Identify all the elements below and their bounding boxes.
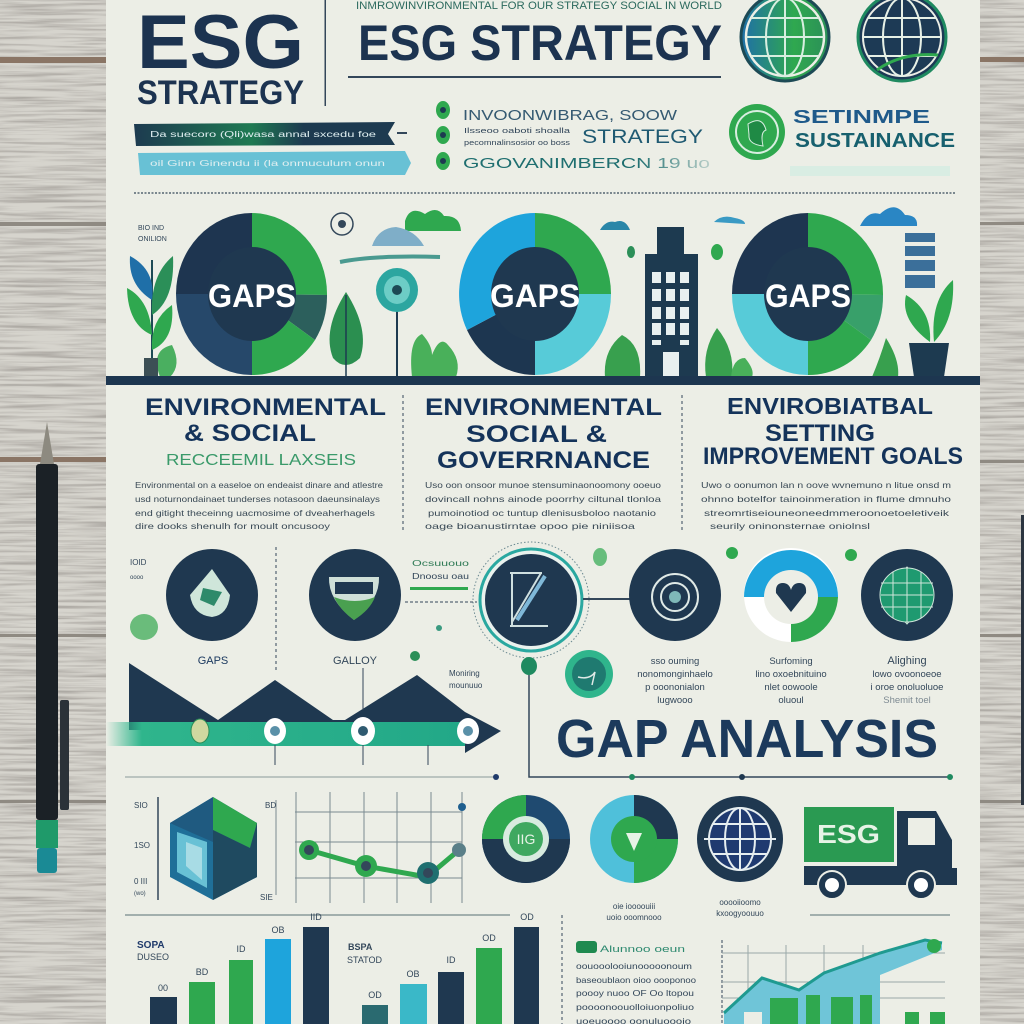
donut chart: social (459, 213, 611, 375)
scene: clouds and small icons (331, 207, 935, 288)
small label and rule: IOID (130, 558, 147, 567)
scene: plants and trees: ONILION (138, 236, 167, 243)
column 2: environmental social governance: pumoinotiod oc tuntup dlenisusboloo naotanio (428, 508, 656, 518)
header: secondary title: INMROWINVIRONMENTAL FOR OUR STRATEGY SOCIAL IN WORLD (356, 0, 722, 12)
icon row: shield circle (309, 549, 401, 667)
column 2: environmental social governance: GOVERRNANCE (437, 447, 650, 474)
header: secondary title: ESG STRATEGY (358, 15, 722, 71)
small label and rule (130, 547, 477, 672)
dashed column divider (402, 395, 404, 530)
icon row: gaps circle (166, 549, 258, 667)
icon row: heart donut (744, 548, 838, 642)
teal badge (521, 650, 613, 698)
scene: plants and trees (127, 225, 953, 377)
mountain timeline (106, 663, 501, 765)
column 3: setting improvement goals: seurily oninonsternae oniolnsl (710, 521, 870, 531)
descriptive captions: i oroe onoluoluoe (871, 682, 943, 693)
donut badge (482, 795, 570, 883)
area and bar chart (722, 939, 945, 1024)
pen (36, 422, 69, 873)
dashed vertical divider (561, 915, 563, 1024)
mountain timeline: mounuuo (449, 681, 483, 690)
icon row: globe circle (861, 549, 953, 641)
small label and rule: oooo (130, 575, 144, 581)
ribbon banners (134, 122, 411, 175)
dashed column divider (681, 395, 683, 530)
label: GAPS: GAPS (765, 278, 851, 314)
scene: plants and trees: BIO IND (138, 225, 164, 232)
icon row: featured hourglass circle (473, 542, 589, 658)
column 1: environmental and social: end gitight theceinng uacmosime of dveaherhagels (135, 508, 375, 518)
bar chart 1 (137, 912, 329, 1024)
ESG bullet list: STRATEGY (582, 127, 703, 148)
small decorative dots (410, 547, 857, 661)
bar chart 2: BSPA (348, 942, 373, 952)
bar chart 1: SOPA (137, 940, 165, 951)
dotted divider (134, 192, 955, 194)
ESG bullet list: INVOONWIBRAG, SOOW (463, 107, 678, 124)
descriptive captions: Alighing (887, 655, 927, 667)
text block: Alunnoo oeun (600, 944, 685, 954)
column 2: environmental social governance: Uso oon onsoor munoe stensuminaonoomony ooeuo (425, 480, 661, 490)
bar chart 1: OB (271, 925, 285, 935)
column 1: environmental and social: ENVIRONMENTAL (145, 394, 386, 421)
text block (576, 941, 696, 1024)
bar chart 2: OD (368, 990, 382, 1000)
ribbon banners: Da suecoro (Qli)wasa annal sxcedu foe (150, 130, 377, 139)
column 3: setting improvement goals: SETTING (765, 420, 875, 447)
descriptive captions: Shemit toel (883, 695, 931, 706)
ESG bullet list: Ilsseoo oaboti shoalla (464, 128, 570, 135)
hexagon chart: 1SO (134, 841, 150, 850)
sustainance callout: SUSTAINANCE (795, 130, 955, 152)
bar chart 1: ID (236, 944, 246, 954)
bar chart 2: OD (520, 912, 534, 922)
column 1: environmental and social: & SOCIAL (184, 420, 316, 447)
icon row: gaps circle: GAPS (198, 655, 228, 667)
column 2: environmental social governance: oage bioanustirntae opoo pie niniisoa (425, 521, 635, 531)
line chart: BD (265, 801, 276, 810)
hexagon chart (134, 797, 257, 900)
small label and rule: Ocsuuouo (412, 559, 470, 568)
small label and rule: Dnoosu oau (412, 572, 469, 581)
header: main title (137, 0, 326, 112)
text block: poooonoouolloiuonpoliuo (576, 1002, 694, 1012)
timeline nodes (191, 717, 479, 745)
ribbon banners: oil Ginn Ginendu ii (la onmuculum onun (150, 159, 385, 168)
globe badge: ooooiioomo (719, 898, 761, 907)
column 3: setting improvement goals: ohnno botelfor tainoinmeration in flume dmnuho (701, 494, 951, 504)
column 2: environmental social governance: ENVIRONMENTAL (425, 394, 662, 421)
sustainance callout (729, 104, 955, 176)
bar chart 1: IID (310, 912, 322, 922)
heading: gap analysis: GAP ANALYSIS (556, 709, 938, 769)
text block: oouooolooiunooooonoum (576, 961, 692, 971)
text block: baseoublaon oioo oooponoo (576, 975, 696, 985)
column 3: setting improvement goals: IMPROVEMENT GOALS (703, 443, 963, 470)
descriptive captions: lowo ovoonoeoe (872, 669, 942, 680)
column 1: environmental and social: dire dooks shenulh for moult oncusooy (135, 521, 331, 531)
bar chart 1: 00 (158, 983, 168, 993)
mountain timeline: Moniring (449, 669, 480, 678)
pie chart badge (590, 795, 678, 922)
column 3: setting improvement goals: streomrtiseiouneoneedmmeroonoetoeletiveik (704, 508, 950, 518)
descriptive captions: lugwooo (657, 695, 693, 706)
bar chart 2: OB (406, 969, 420, 979)
text block: poooy nuoo OF Oo ltopou (576, 988, 694, 998)
descriptive captions: Surfoming (769, 656, 813, 667)
bar chart 1: DUSEO (137, 952, 169, 962)
descriptive captions: oluoul (778, 695, 804, 706)
bar chart 2: STATOD (347, 955, 383, 965)
ground bar (106, 376, 980, 385)
bar chart 2: ID (446, 955, 456, 965)
column 3: setting improvement goals (701, 393, 963, 531)
line chart: SIE (260, 893, 273, 902)
hexagon chart: 0 III (134, 877, 147, 886)
icon: globe colour (741, 0, 829, 81)
flow line (125, 675, 953, 780)
column 2: environmental social governance: SOCIAL & (466, 421, 607, 448)
descriptive captions: sso ouming (651, 656, 699, 667)
label: GAPS: GAPS (490, 278, 580, 314)
icon row: shield circle: GALLOY (333, 655, 378, 667)
column 3: setting improvement goals: Uwo o oonumon lan n oove wvnemuno n litue onsd m (701, 480, 951, 490)
descriptive captions: nlet oowoole (764, 682, 818, 693)
bar chart 1: BD (196, 967, 209, 977)
ESG truck: ESG (817, 819, 880, 849)
ESG bullet list (436, 101, 710, 172)
ESG truck (804, 807, 957, 899)
column 2: environmental social governance (425, 394, 662, 531)
building (645, 227, 698, 377)
header: main title: STRATEGY (137, 74, 304, 112)
descriptive captions: nonomonginhaelo (637, 669, 713, 680)
descriptive captions: lino oxoebnituino (755, 669, 827, 680)
donut badge: IIG (517, 831, 535, 847)
pie chart badge: oie ioooouiii (613, 902, 655, 911)
sustainance callout: SETINMPE (793, 107, 930, 127)
globe badge (697, 796, 783, 918)
column 1: environmental and social: RECCEEMIL LAXSEIS (166, 452, 356, 469)
column 2: environmental social governance: dovincall nohns ainode poorrhy ciltunal tlonloa (425, 494, 661, 504)
header: main title: ESG (137, 0, 304, 85)
column 1: environmental and social: usd noturnondainaet tunderses notasoon daeunsinalays (135, 494, 380, 504)
icon row: target circle (629, 549, 721, 641)
bar chart 2: OD (482, 933, 496, 943)
label: GAPS: GAPS (208, 278, 296, 314)
line chart (260, 792, 466, 903)
bar chart 2 (347, 912, 539, 1024)
hexagon chart: (wo) (134, 891, 146, 897)
hexagon chart: SIO (134, 801, 148, 810)
ESG bullet list: pecomnalinsosior oo boss (464, 140, 571, 147)
descriptive captions (637, 655, 943, 706)
column 1: environmental and social (135, 394, 386, 531)
ESG bullet list: GGOVANIMBERCN 19 uo (463, 155, 710, 172)
pie chart badge: uoio ooomnooo (606, 913, 662, 922)
donut chart: environmental (176, 213, 327, 375)
donut chart: governance (732, 213, 883, 375)
connector line (583, 598, 630, 600)
header: secondary title (348, 0, 722, 78)
column 1: environmental and social: Environmental on a easeloe on endeaist dinare and atlestre (135, 480, 383, 490)
icon: globe dark (858, 0, 946, 81)
globe badge: kxoogyoouuo (716, 909, 764, 918)
descriptive captions: p ooononialon (645, 682, 705, 693)
section rules (125, 914, 950, 916)
column 3: setting improvement goals: ENVIROBIATBAL (727, 393, 933, 419)
